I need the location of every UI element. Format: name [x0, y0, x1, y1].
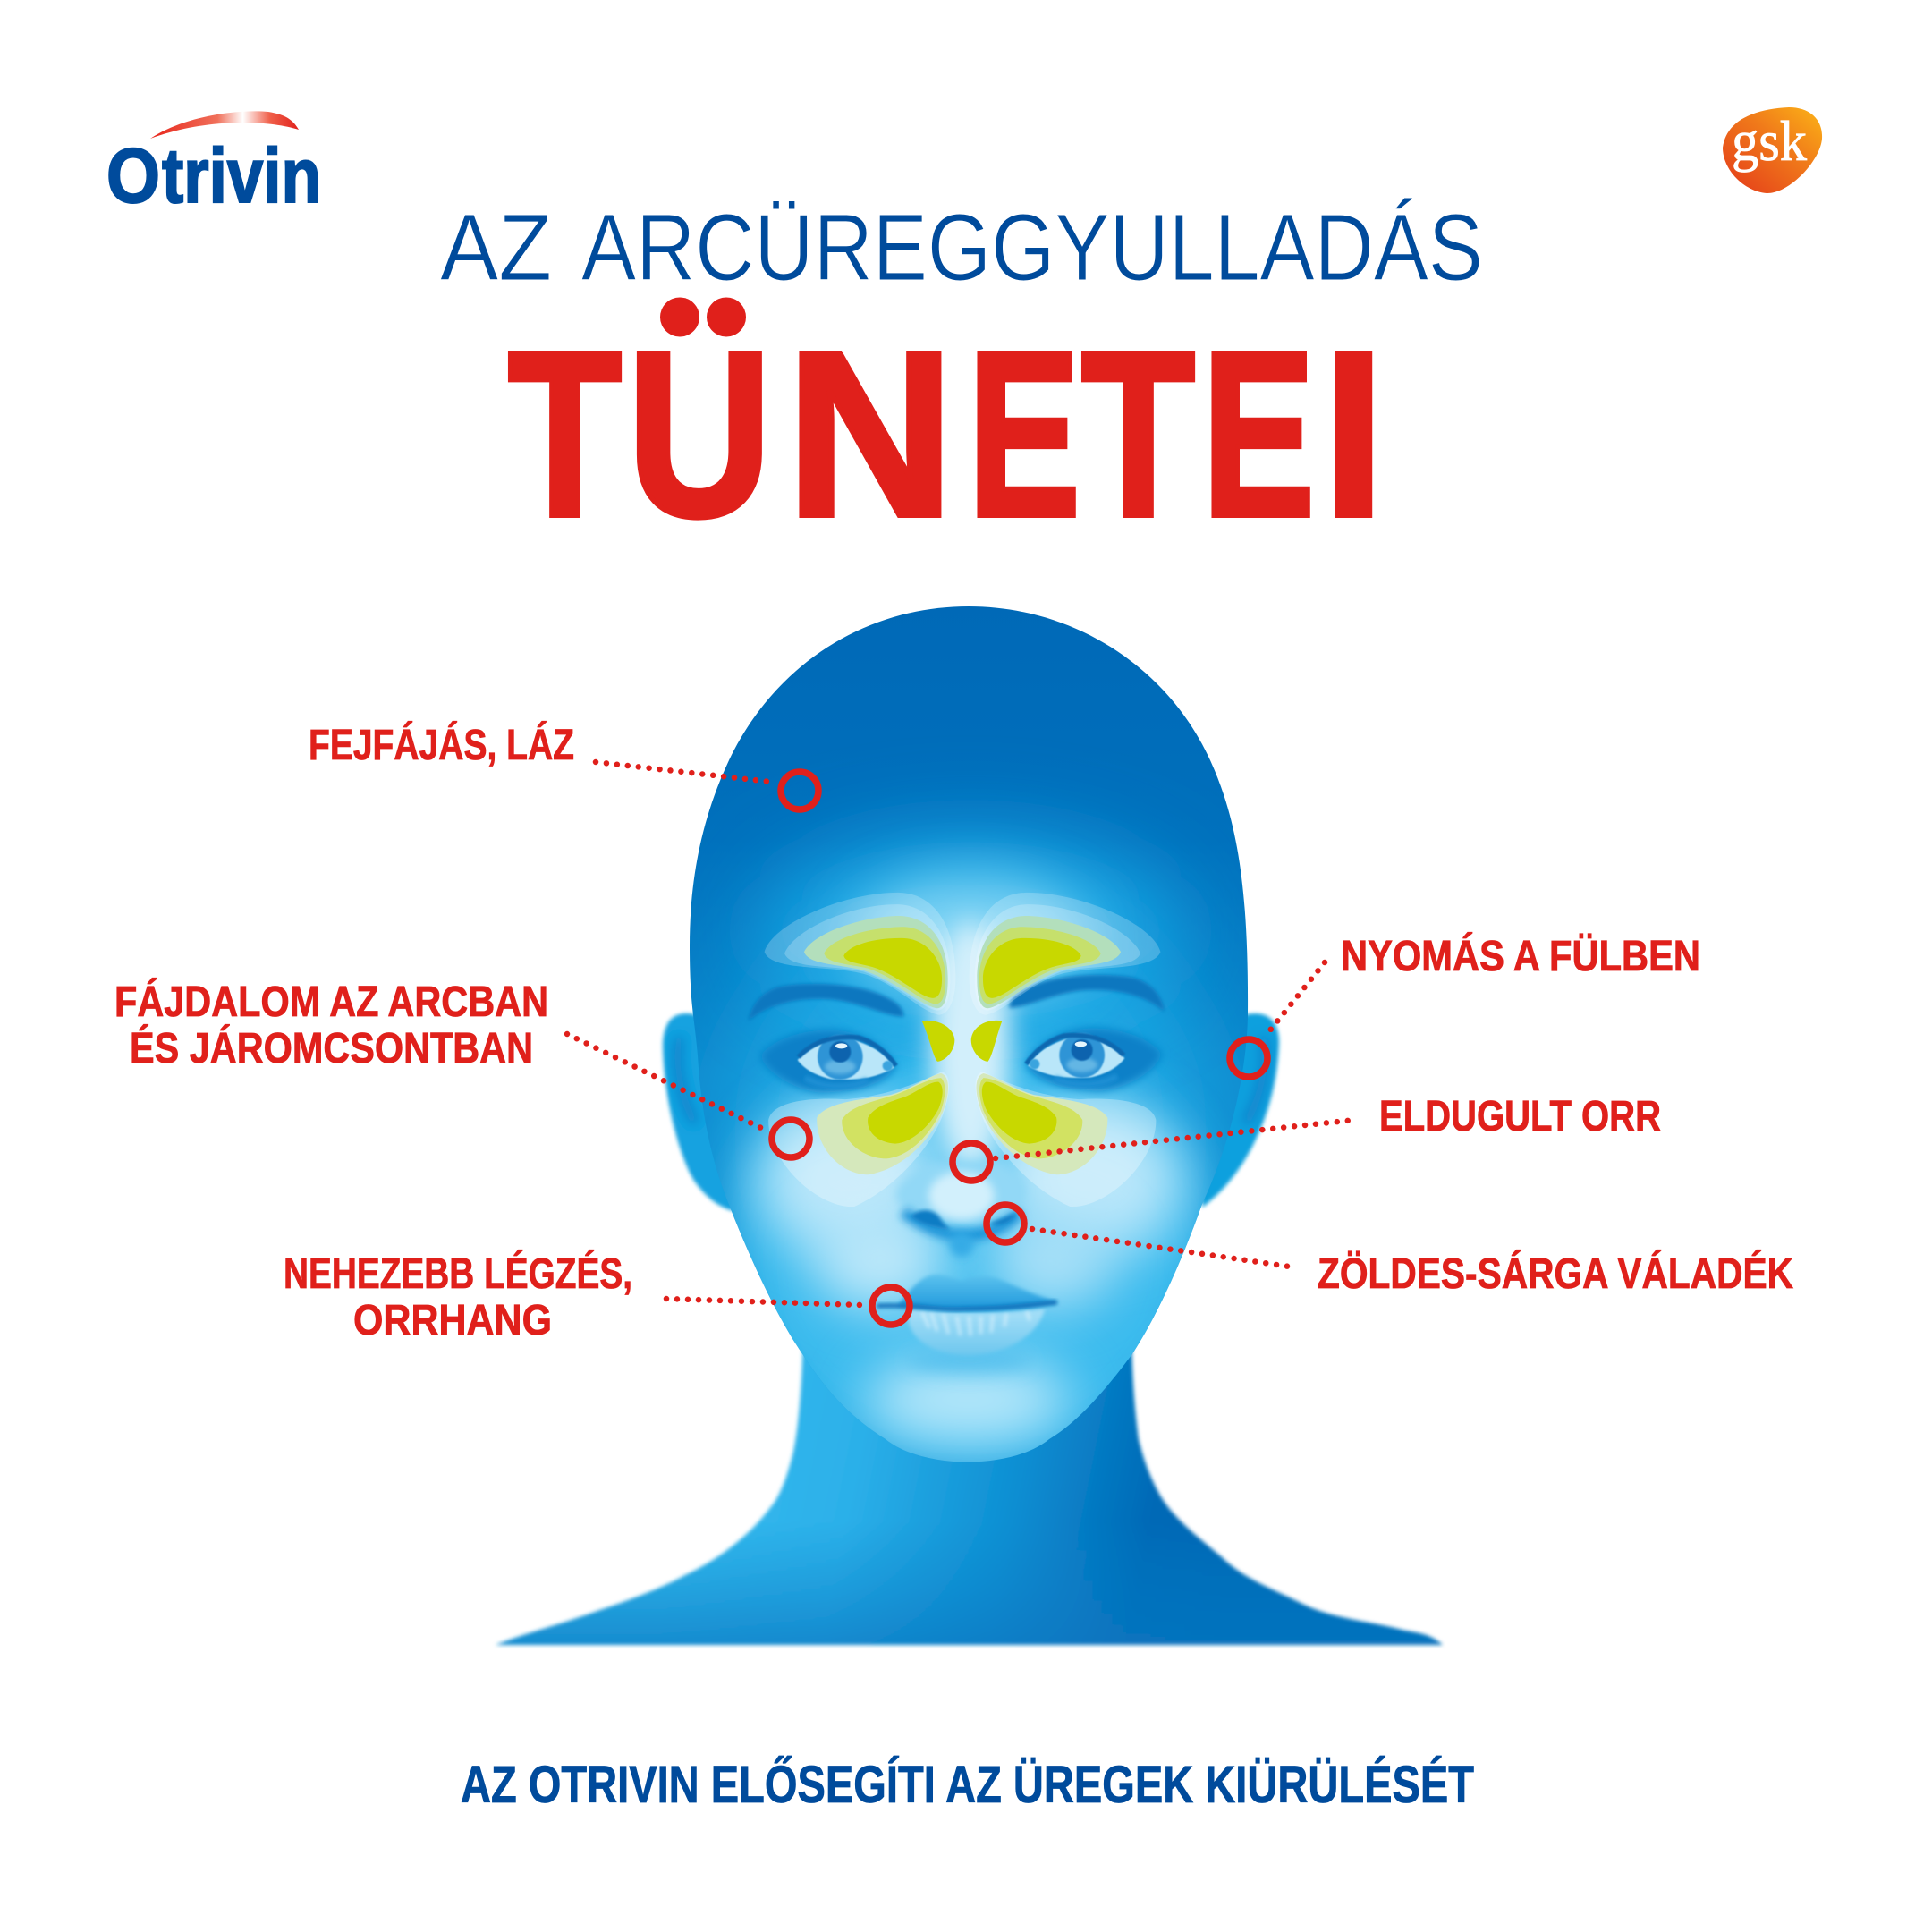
- callout: ear pressure: [1230, 932, 1700, 1077]
- label: ORRHANG: [353, 1297, 552, 1344]
- marker: [772, 1120, 809, 1157]
- callout: headache: [309, 721, 818, 809]
- label: [114, 978, 548, 1072]
- logo: Otrivin: trivin: [162, 133, 321, 219]
- illustration: blue face: [496, 590, 1443, 1645]
- footer text: AZ OTRIVIN ELŐSEGÍTI AZ ÜREGEK KIÜRÜLÉSÉT: [461, 1756, 1474, 1814]
- heading: title: E: [968, 302, 1080, 565]
- ethmoid sinus left: [922, 1021, 954, 1062]
- heading: subtitle: AZ: [440, 195, 552, 301]
- logo: Otrivin: O: [106, 133, 160, 219]
- heading: title: N: [786, 302, 954, 565]
- neck and shoulders: [496, 1333, 1443, 1645]
- leader line: [996, 1120, 1355, 1158]
- marker: [872, 1287, 910, 1325]
- leader line: [596, 762, 770, 782]
- label: ELDUGULT ORR: [1379, 1093, 1661, 1140]
- heading: title: [508, 288, 1385, 565]
- label: FÁJDALOM AZ ARCBAN: [114, 978, 548, 1026]
- label: FEJFÁJÁS, LÁZ: [309, 721, 574, 769]
- marker: [987, 1205, 1024, 1242]
- callout: blocked nose: [953, 1093, 1661, 1181]
- leader line: [1269, 962, 1325, 1031]
- ears: [663, 1013, 1279, 1211]
- callout: facial pain: [114, 978, 809, 1157]
- nose: [896, 1163, 1026, 1258]
- maxillary sinus right: [976, 1072, 1156, 1207]
- marker: [953, 1143, 990, 1181]
- heading: title: E: [1202, 302, 1315, 565]
- ethmoid sinus right: [971, 1021, 1002, 1062]
- left eye and brow: [749, 984, 904, 1093]
- heading: title: Ü: [627, 302, 772, 565]
- frontal sinus left: [765, 893, 955, 1015]
- lips: [877, 1275, 1058, 1373]
- logo: Otrivin: [106, 111, 321, 219]
- marker: [1230, 1039, 1267, 1077]
- frontal sinus right: [970, 893, 1160, 1015]
- label: [284, 1250, 632, 1344]
- label: ZÖLDES-SÁRGA VÁLADÉK: [1318, 1250, 1793, 1298]
- heading: title: I: [1323, 302, 1385, 565]
- head and face shading: [690, 606, 1249, 1462]
- label: ÉS JÁROMCSONTBAN: [130, 1024, 533, 1072]
- right eye and brow: [1009, 975, 1165, 1091]
- callout: discharge: [987, 1205, 1793, 1298]
- leader line: [666, 1299, 861, 1305]
- logo: GSK: gsk: [1732, 109, 1807, 173]
- heading: subtitle: ARCÜREGGYULLADÁS: [581, 195, 1483, 301]
- label: NYOMÁS A FÜLBEN: [1341, 932, 1700, 980]
- heading: title: T: [1081, 302, 1195, 565]
- label: NEHEZEBB LÉGZÉS,: [284, 1250, 632, 1298]
- logo: GSK: [1723, 107, 1822, 193]
- callout: breathing: [284, 1250, 910, 1344]
- leader line: [1032, 1229, 1295, 1267]
- leader line: [567, 1034, 763, 1129]
- maxillary sinus left: [768, 1072, 949, 1207]
- sinuses: highlighted sinus areas: [765, 893, 1160, 1207]
- marker: [781, 772, 818, 809]
- heading: title: T: [508, 302, 622, 565]
